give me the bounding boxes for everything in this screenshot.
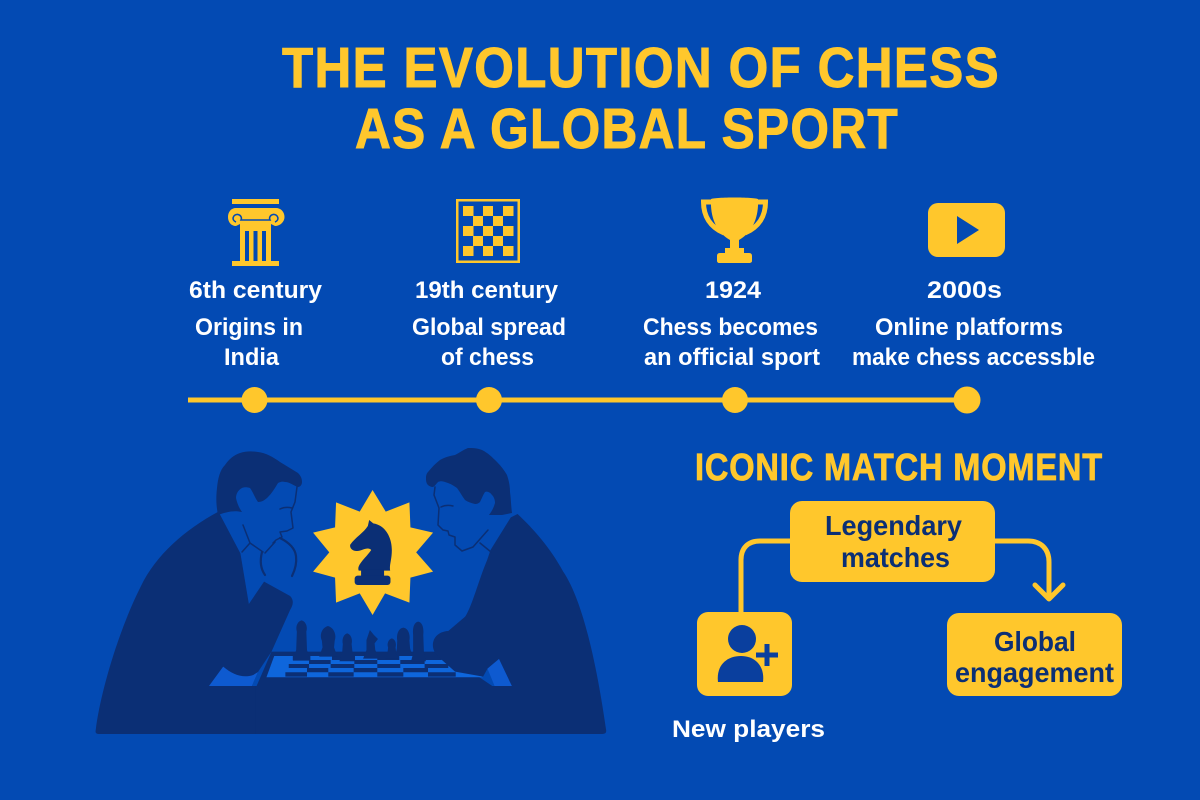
date and description: India: [224, 344, 280, 371]
date and description: of chess: [441, 344, 534, 371]
date and description: 1924: [705, 277, 762, 304]
date and description: make chess accessble: [852, 344, 1095, 371]
timeline line with markers: [188, 386, 980, 414]
date and description: 19th century: [415, 277, 559, 304]
heading: iconic match moment: ICONIC MATCH MOMENT: [695, 447, 1103, 489]
date and description: [412, 277, 566, 371]
milestone: 1924: [643, 198, 820, 371]
box: legendary matches: matches: [841, 542, 950, 573]
right player: [256, 448, 606, 734]
milestone: 2000s: [852, 203, 1095, 371]
chessboard: [256, 652, 496, 688]
box: legendary matches: [790, 501, 995, 582]
box: new players icon: [697, 612, 792, 696]
date and description: an official sport: [644, 344, 820, 371]
title: [282, 36, 1000, 161]
icon: ionic column: [228, 199, 284, 266]
icon: chessboard: [457, 200, 519, 262]
milestone: 6th century: [189, 199, 323, 371]
burst with knight icon: [313, 490, 433, 615]
title: AS A GLOBAL SPORT: [355, 97, 899, 161]
date and description: [189, 277, 323, 371]
flow diagram: [672, 501, 1122, 743]
label: new players: New players: [672, 716, 825, 743]
box: legendary matches: Legendary: [825, 510, 962, 541]
date and description: 2000s: [927, 277, 1002, 304]
date and description: Global spread: [412, 314, 566, 341]
box: global engagement: engagement: [955, 657, 1114, 688]
box: global engagement: Global: [994, 626, 1076, 657]
box: global engagement: [947, 613, 1122, 696]
date and description: [852, 277, 1095, 371]
icon: trophy: [704, 198, 766, 263]
date and description: Chess becomes: [643, 314, 818, 341]
chess pieces: [293, 620, 426, 661]
date and description: [643, 277, 820, 371]
panel: timeline: [188, 198, 1095, 414]
date and description: 6th century: [189, 277, 323, 304]
title: THE EVOLUTION OF CHESS: [282, 36, 1000, 100]
date and description: Online platforms: [875, 314, 1063, 341]
icon: video play button: [928, 203, 1005, 257]
illustration: two chess players: [96, 448, 606, 734]
connector to new players: [741, 541, 792, 614]
arrow to global engagement: [993, 541, 1063, 599]
left player: [96, 451, 302, 734]
date and description: Origins in: [195, 314, 303, 341]
milestone: 19th century: [412, 200, 566, 371]
